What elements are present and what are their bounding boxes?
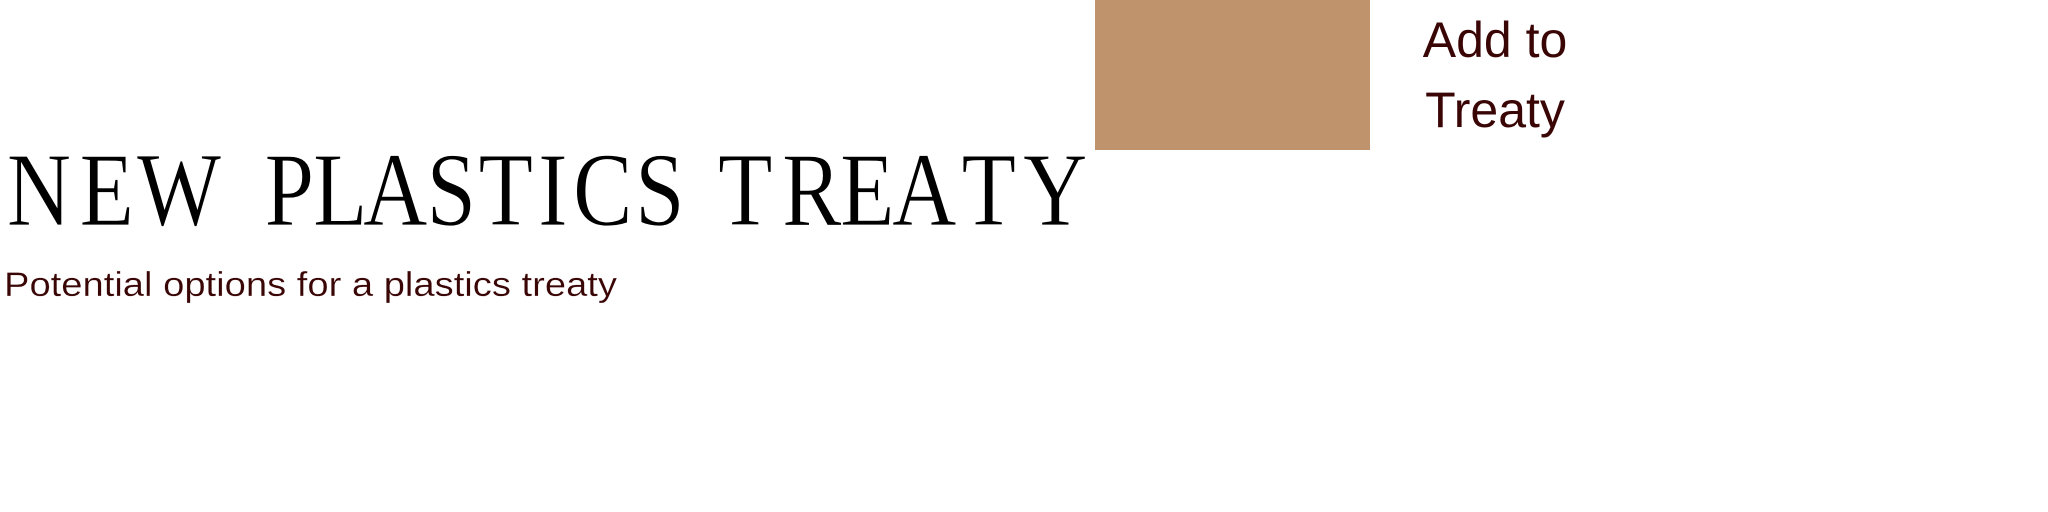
label: Add to Treaty: Add to <box>1423 12 1567 68</box>
label: Add to Treaty: Treaty <box>1425 82 1565 138</box>
title: PLASTICS <box>265 132 685 249</box>
subtitle: Potential options for a plastics treaty <box>4 266 617 304</box>
title: TREATY <box>718 132 1087 249</box>
title: NEW <box>7 132 221 249</box>
tan colour block <box>1095 0 1370 150</box>
title <box>7 132 1087 249</box>
label: Add to Treaty <box>1423 12 1567 138</box>
